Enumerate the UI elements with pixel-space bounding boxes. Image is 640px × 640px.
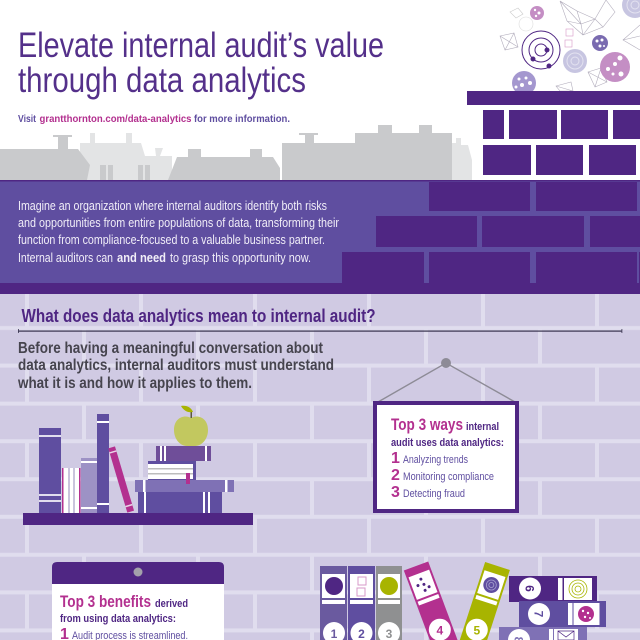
section intro text xyxy=(17,340,334,392)
sign list: Detecting fraud xyxy=(403,488,465,500)
intro text: Imagine an organization where internal auditors identify both risks xyxy=(18,198,327,213)
card: top 3 benefits xyxy=(52,562,224,640)
section intro text: data analytics, internal auditors must understand xyxy=(18,357,334,374)
icon: apple xyxy=(174,406,208,446)
card body xyxy=(52,584,224,640)
sign list: 1 xyxy=(391,450,400,467)
icon: dotted data circles xyxy=(512,6,630,95)
binder 8 xyxy=(499,627,587,640)
website link line: for more information. xyxy=(194,113,290,125)
card nail xyxy=(134,568,142,576)
light buildings xyxy=(80,133,472,180)
dark band xyxy=(0,283,640,294)
intro text: and opportunities from entire populations of data, transforming their xyxy=(18,215,340,230)
card heading xyxy=(60,592,188,625)
icon: orbit target xyxy=(522,31,560,69)
section intro text: what it is and how it applies to them. xyxy=(17,375,252,392)
binder 5: 5 xyxy=(473,624,480,638)
binder 7 xyxy=(519,601,606,627)
website link line: Visit xyxy=(18,113,36,125)
binder 7: 7 xyxy=(532,611,546,618)
dark buildings xyxy=(0,125,452,180)
binders illustration xyxy=(320,561,606,640)
card list xyxy=(60,626,188,640)
lower brick background xyxy=(0,294,640,640)
sign heading: internal xyxy=(466,421,499,433)
sign heading xyxy=(391,415,504,449)
data icon cluster xyxy=(500,0,640,95)
binder 5 xyxy=(457,562,510,640)
sign list xyxy=(391,450,494,501)
website link line xyxy=(18,113,290,125)
binder 6: 6 xyxy=(522,585,536,592)
title xyxy=(18,26,384,100)
card heading: Top 3 benefits xyxy=(60,592,151,611)
sign list: 3 xyxy=(391,484,400,501)
icon: wireframe network xyxy=(500,0,640,91)
sign frame xyxy=(375,403,517,511)
sign heading: Top 3 ways xyxy=(391,415,463,434)
sign heading: audit uses data analytics: xyxy=(391,437,504,449)
upper brick wall xyxy=(467,91,640,175)
stacked books xyxy=(135,446,234,513)
section heading: What does data analytics mean to internal audit? xyxy=(22,306,376,326)
hanging wire and nail xyxy=(378,358,515,402)
binder 2 xyxy=(348,566,375,640)
hanging sign: top 3 ways xyxy=(375,358,517,511)
icon: concentric circles xyxy=(563,0,640,73)
card heading: from using data analytics: xyxy=(60,613,176,625)
dark bricks xyxy=(342,182,640,283)
intro text: and need xyxy=(117,250,166,265)
intro text: Internal auditors can xyxy=(18,250,113,265)
intro text xyxy=(18,198,340,265)
skyline silhouette xyxy=(0,125,472,180)
binder 3 xyxy=(376,566,402,640)
background: white header xyxy=(0,0,640,181)
binder 4: 4 xyxy=(436,624,443,638)
upright books xyxy=(39,414,109,513)
shelf xyxy=(23,513,253,525)
section intro text: Before having a meaningful conversation about xyxy=(18,340,324,357)
binder 4 xyxy=(404,561,460,640)
sign list: Analyzing trends xyxy=(403,454,468,466)
website link line: grantthornton.com/data-analytics xyxy=(40,113,192,125)
title: Elevate internal audit’s value xyxy=(18,26,384,65)
panel: intro xyxy=(0,180,640,294)
intro text: function from compliance-focused to a valuable business partner. xyxy=(18,232,325,247)
card heading: derived xyxy=(155,598,188,610)
intro text: to grasp this opportunity now. xyxy=(170,250,311,265)
binder 1 xyxy=(320,566,347,640)
binder 6 xyxy=(509,576,597,602)
sign list: Monitoring compliance xyxy=(403,471,494,483)
title: through data analytics xyxy=(18,61,306,100)
bookshelf illustration xyxy=(23,406,253,525)
magenta leaning book xyxy=(108,446,134,513)
sign list: 2 xyxy=(391,467,400,484)
card header xyxy=(52,562,224,584)
